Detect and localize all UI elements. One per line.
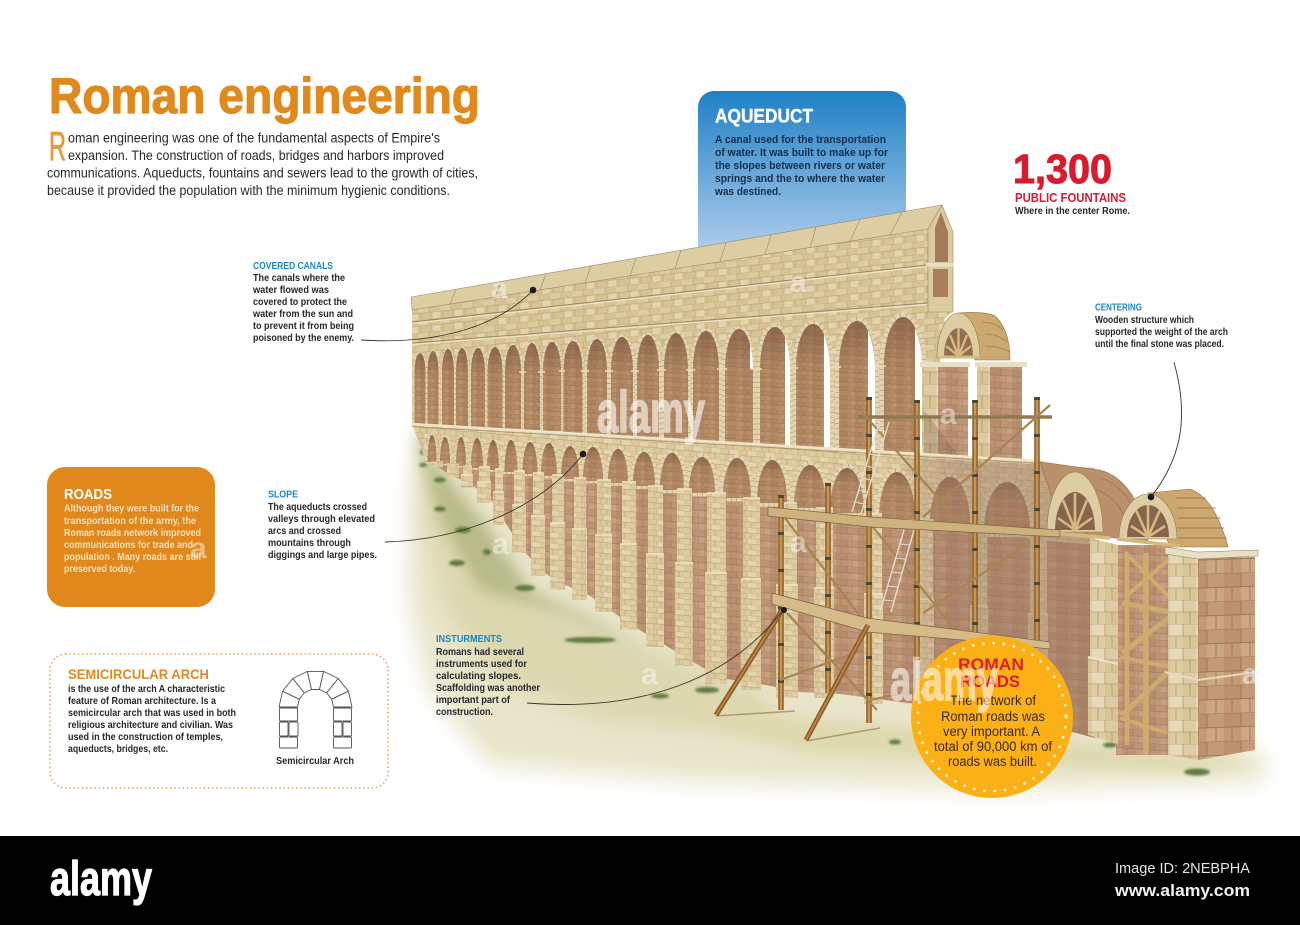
callout text: Roman roads was [941, 709, 1045, 724]
leader line: instruments [527, 607, 787, 704]
callout text: roads was built. [948, 754, 1037, 769]
label: instruments: important part of [436, 695, 511, 706]
watermarks: a [790, 526, 807, 559]
label: covered canals: COVERED CANALS [253, 261, 333, 272]
stat: 1,300 public fountains [1013, 146, 1130, 217]
label: instruments [436, 634, 540, 718]
brick backing [425, 458, 1095, 738]
label: covered canals [252, 261, 354, 344]
end piers of the upper arcade [920, 312, 1027, 465]
opening behind wooden frame [1116, 545, 1170, 755]
lower arcade [412, 424, 1095, 738]
callout heading: ROADS [960, 672, 1020, 691]
label: slope: valleys through elevated [268, 514, 375, 525]
label: instruments: calculating slopes. [436, 671, 521, 682]
label: slope: mountains through [268, 538, 351, 549]
lower platform [772, 593, 1050, 649]
panel: semicircular arch [50, 654, 388, 788]
label: covered canals: covered to protect the [253, 297, 347, 308]
stone wall [412, 229, 952, 456]
callout heading: ROMAN [958, 655, 1024, 674]
label: slope: diggings and large pipes. [268, 550, 377, 561]
lower channel opening [933, 269, 948, 297]
diagonal braces [780, 405, 1050, 710]
watermarks: a [641, 658, 658, 691]
panel: aqueduct [698, 91, 906, 266]
string courses [412, 265, 927, 343]
centering arch, left [1040, 472, 1110, 538]
aqueduct text: springs and the to where the water [715, 173, 885, 185]
pier A [922, 365, 938, 460]
roads text: Roman roads network improved [64, 528, 201, 539]
watermarks: a [492, 528, 509, 561]
middle platform [768, 507, 1060, 537]
intro text block: because it provided the population with the minimum hygienic conditions. [47, 182, 450, 198]
roads text: Although they were built for the [64, 504, 199, 514]
stat: 1,300 public fountains: Where in the center Rome. [1015, 206, 1130, 217]
roads text: population . Many roads are still [64, 552, 201, 563]
intro text block: expansion. The construction of roads, bridges and harbors improved [68, 147, 444, 163]
scaffold ground shadows [716, 711, 880, 741]
drop cap: R [49, 123, 66, 169]
leader line: covered canals [361, 287, 536, 341]
roads heading: ROADS [64, 486, 112, 503]
channel end face [928, 205, 953, 312]
semicircular arch text: semicircular arch that was used in both [68, 708, 236, 719]
stat: 1,300 public fountains: PUBLIC FOUNTAINS [1015, 190, 1126, 205]
scaffolding [716, 397, 1060, 740]
callout text [934, 693, 1052, 769]
label: centering: supported the weight of the arch [1095, 327, 1228, 338]
upper wall of the aqueduct [411, 205, 954, 456]
upper arcade [414, 317, 930, 453]
aqueduct heading: AQUEDUCT [715, 106, 813, 128]
watermarks: a [491, 272, 508, 305]
ladder lower [880, 530, 914, 612]
label: slope: arcs and crossed [268, 526, 341, 537]
label: covered canals: poisoned by the enemy. [253, 333, 354, 344]
label: centering: Wooden structure which [1095, 315, 1194, 326]
watermarks: a [790, 266, 807, 299]
intro text block [47, 123, 478, 198]
top ledger [858, 415, 1052, 419]
leader line: slope [385, 451, 586, 542]
label: covered canals: water from the sun and [252, 309, 353, 320]
poles [781, 397, 1037, 723]
label: slope: The aqueducts crossed [268, 502, 367, 513]
icon: semicircular arch [279, 671, 352, 748]
semicircular arch text: feature of Roman architecture. Is a [68, 696, 216, 707]
callout heading [958, 655, 1024, 691]
centering arch, right [1117, 494, 1180, 546]
semicircular arch text [68, 684, 236, 755]
large end pier [1165, 547, 1258, 760]
ground under the aqueduct [408, 430, 1268, 790]
intro text block: oman engineering was one of the fundamental aspects of Empire's [68, 130, 440, 146]
ladder upper [852, 420, 889, 514]
watermarks: a [940, 398, 957, 431]
title: Roman engineering [49, 68, 480, 124]
website: www.alamy.com [1114, 881, 1250, 900]
label: instruments: instruments used for [436, 659, 527, 670]
pier left of the frame [1088, 538, 1118, 744]
aqueduct text: of water. It was built to make up for [715, 147, 888, 159]
label: instruments: Scaffolding was another [436, 683, 540, 694]
callout text: total of 90,000 km of [934, 739, 1052, 754]
label: instruments: Romans had several [436, 647, 524, 658]
pier ledges and imposts [461, 467, 1048, 614]
pier B [977, 365, 990, 461]
semicircular arch text: aqueducts, bridges, etc. [68, 744, 168, 755]
wooden frame [1120, 552, 1172, 755]
intro text block: communications. Aqueducts, fountains and sewers lead to the growth of cities, [47, 164, 478, 180]
label: centering: until the final stone was placed. [1095, 339, 1224, 350]
roof coping [411, 205, 942, 310]
leader line: centering [1148, 362, 1182, 500]
bottom black credit band [0, 836, 1300, 925]
label: centering: CENTERING [1095, 302, 1142, 314]
dotted ring [918, 643, 1066, 791]
aqueduct text [714, 134, 888, 198]
image id: Image ID: 2NEBPHA [1115, 860, 1250, 877]
watermarks: alamy [890, 648, 998, 713]
label: slope [268, 490, 377, 561]
watermarks: a [190, 532, 207, 565]
callout text: very important. A [943, 724, 1040, 739]
label: instruments: INSTURMENTS [436, 634, 502, 645]
arch voussoir joints [414, 317, 922, 453]
semicircular arch text: is the use of the arch A characteristic [68, 684, 225, 695]
label: slope: SLOPE [268, 490, 298, 500]
semicircular arch text: religious architecture and civilian. Was [68, 720, 233, 731]
callout: roman roads [911, 636, 1073, 798]
watermarks [190, 266, 1259, 713]
arch shadow [414, 317, 922, 453]
roads text: preserved today. [64, 564, 135, 575]
stone band above the lower arches [412, 424, 1095, 545]
aqueduct text: the slopes between rivers or water [715, 160, 885, 172]
aqueduct text: was destined. [714, 186, 781, 198]
roads text [64, 504, 201, 575]
end section with centering [1040, 462, 1258, 760]
callout text: The network of [950, 693, 1036, 708]
arch caption: Semicircular Arch [276, 756, 354, 767]
roads text: communications for trade and [64, 540, 193, 551]
watermarks: alamy [597, 380, 705, 445]
brick bays with stone arch rings [414, 317, 922, 453]
grass tufts [419, 450, 1210, 776]
stone piers [434, 461, 1048, 724]
semicircular arch heading: SEMICIRCULAR ARCH [68, 666, 209, 682]
lower arches [428, 435, 1030, 533]
label: centering [1095, 302, 1228, 350]
stat: 1,300 public fountains: 1,300 [1013, 146, 1112, 192]
upper wooden centering [937, 312, 1010, 360]
label: covered canals: The canals where the [253, 273, 345, 284]
watermarks: a [1242, 658, 1259, 691]
pier impost caps [519, 365, 930, 372]
label: instruments: construction. [436, 707, 493, 718]
label: covered canals: to prevent it from being [253, 321, 354, 332]
covered channel opening [935, 212, 948, 262]
label: covered canals: water flowed was [252, 285, 329, 296]
shaded right part of the wall [890, 456, 1095, 738]
sky through the arches [750, 328, 922, 453]
roads text: transportation of the army, the [64, 516, 196, 527]
string course on end face [926, 263, 954, 266]
semicircular arch text: used in the construction of temples, [68, 732, 223, 743]
wooden barrel vault, left [1040, 462, 1148, 542]
support struts [716, 610, 868, 740]
alamy logo: alamy [50, 853, 152, 906]
coping tiles [450, 212, 902, 304]
wooden barrel vault, right [1148, 489, 1228, 547]
aqueduct text: A canal used for the transportation [715, 134, 886, 146]
panel: roads [47, 467, 215, 607]
